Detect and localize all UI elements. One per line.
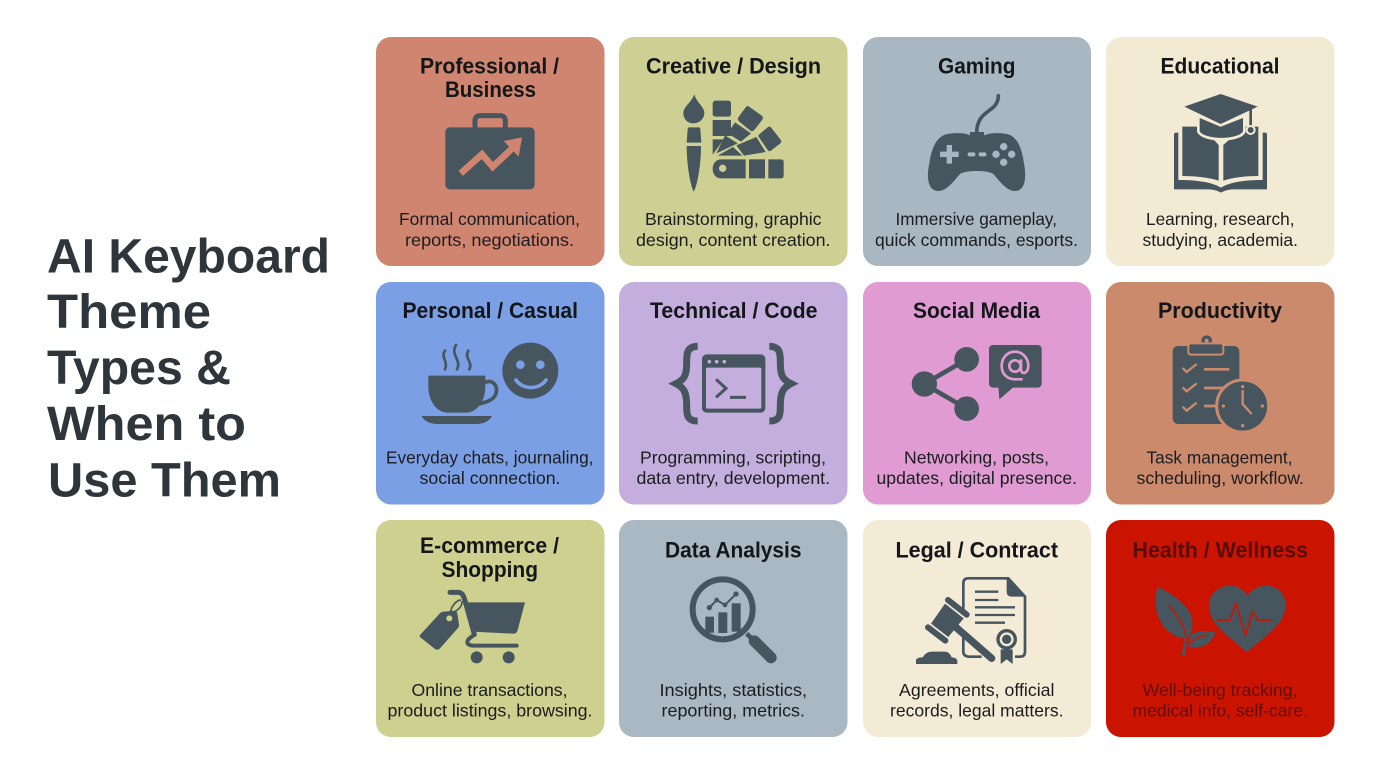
description: social connection. [420, 468, 560, 488]
panel: Productivity [1106, 282, 1334, 504]
heading: Data Analysis: Data Analysis [665, 538, 802, 562]
title: Theme [47, 286, 211, 339]
panel: E-commerce / Shopping [376, 520, 604, 737]
description [660, 680, 807, 720]
description: Online transactions, [412, 680, 568, 700]
title: When to [47, 398, 246, 451]
heading: Professional / Business: Professional / [420, 54, 559, 78]
description: medical info, self-care. [1132, 700, 1308, 720]
heading: Personal / Casual: Personal / Casual [402, 298, 578, 323]
heading: Educational: Educational [1160, 54, 1280, 78]
icon: leaf and heart [1156, 586, 1286, 656]
heading: Gaming: Gaming [938, 54, 1016, 78]
icon: magnifier over chart [693, 579, 771, 658]
panel: Gaming [863, 37, 1091, 266]
heading: E-commerce / Shopping [420, 533, 559, 582]
panel: Creative / Design [619, 37, 848, 266]
description: updates, digital presence. [876, 468, 1077, 488]
panel: Legal / Contract [863, 520, 1091, 737]
title: AI Keyboard [47, 230, 330, 284]
description: studying, academia. [1142, 230, 1298, 250]
description: reports, negotiations. [405, 230, 574, 250]
description: product listings, browsing. [388, 700, 592, 720]
heading: Professional / Business: Business [445, 77, 536, 102]
description: reporting, metrics. [662, 700, 805, 720]
description [636, 448, 830, 488]
description: Insights, statistics, [660, 680, 807, 700]
heading: Creative / Design: Creative / Design [646, 54, 821, 78]
description: Programming, scripting, [640, 448, 826, 468]
description: Networking, posts, [904, 448, 1049, 468]
panel: Educational [1106, 37, 1334, 266]
panel: Health / Wellness [1106, 520, 1334, 737]
heading: Technical / Code: Technical / Code [650, 298, 818, 323]
description [890, 680, 1064, 720]
title: Types & [47, 342, 231, 395]
panel: Data Analysis [619, 520, 848, 737]
heading: E-commerce / Shopping: E-commerce / [420, 533, 559, 558]
icon: game controller [928, 96, 1025, 191]
description [388, 680, 592, 720]
description [875, 209, 1078, 250]
description: Everyday chats, journaling, [386, 448, 594, 468]
panel: Personal / Casual [376, 282, 604, 504]
icon: briefcase with rising arrow [445, 116, 535, 189]
description [386, 448, 594, 488]
panel: Technical / Code [619, 282, 848, 504]
description [1132, 680, 1308, 720]
description: quick commands, esports. [875, 230, 1078, 250]
description: records, legal matters. [890, 700, 1064, 720]
icon: clipboard and clock [1173, 335, 1269, 432]
icon: code window in braces [676, 346, 791, 421]
description [399, 209, 580, 250]
heading: Legal / Contract: Legal / Contract [896, 538, 1059, 562]
icon: paintbrush and swatches [683, 94, 784, 192]
description: Task management, [1146, 448, 1292, 468]
icon: gavel and contract [916, 578, 1026, 664]
description: Immersive gameplay, [896, 209, 1057, 229]
panel: Social Media [863, 282, 1091, 504]
description [876, 448, 1077, 488]
heading: Professional / Business [420, 54, 559, 102]
description: Formal communication, [399, 209, 580, 229]
icon: shopping cart with tag [420, 592, 525, 663]
heading: Social Media: Social Media [913, 298, 1041, 323]
description [1136, 448, 1304, 488]
description: Agreements, official [899, 680, 1054, 700]
panel: Professional / Business [376, 37, 604, 266]
heading: E-commerce / Shopping: Shopping [442, 557, 538, 582]
title: Use Them [48, 454, 281, 508]
description: Learning, research, [1146, 209, 1294, 229]
icon: coffee cup and smiley [422, 343, 558, 424]
description [636, 209, 830, 250]
heading: Health / Wellness: Health / Wellness [1132, 538, 1308, 562]
description: Brainstorming, graphic [645, 209, 822, 229]
description [1142, 209, 1298, 250]
description: design, content creation. [636, 230, 830, 250]
heading: Productivity: Productivity [1158, 298, 1283, 323]
description: scheduling, workflow. [1136, 468, 1304, 488]
title [47, 230, 330, 508]
icon: graduation cap and book [1174, 94, 1267, 193]
icon: share and at-sign bubble [912, 345, 1042, 421]
description: data entry, development. [636, 468, 830, 488]
description: Well-being tracking, [1142, 680, 1298, 700]
